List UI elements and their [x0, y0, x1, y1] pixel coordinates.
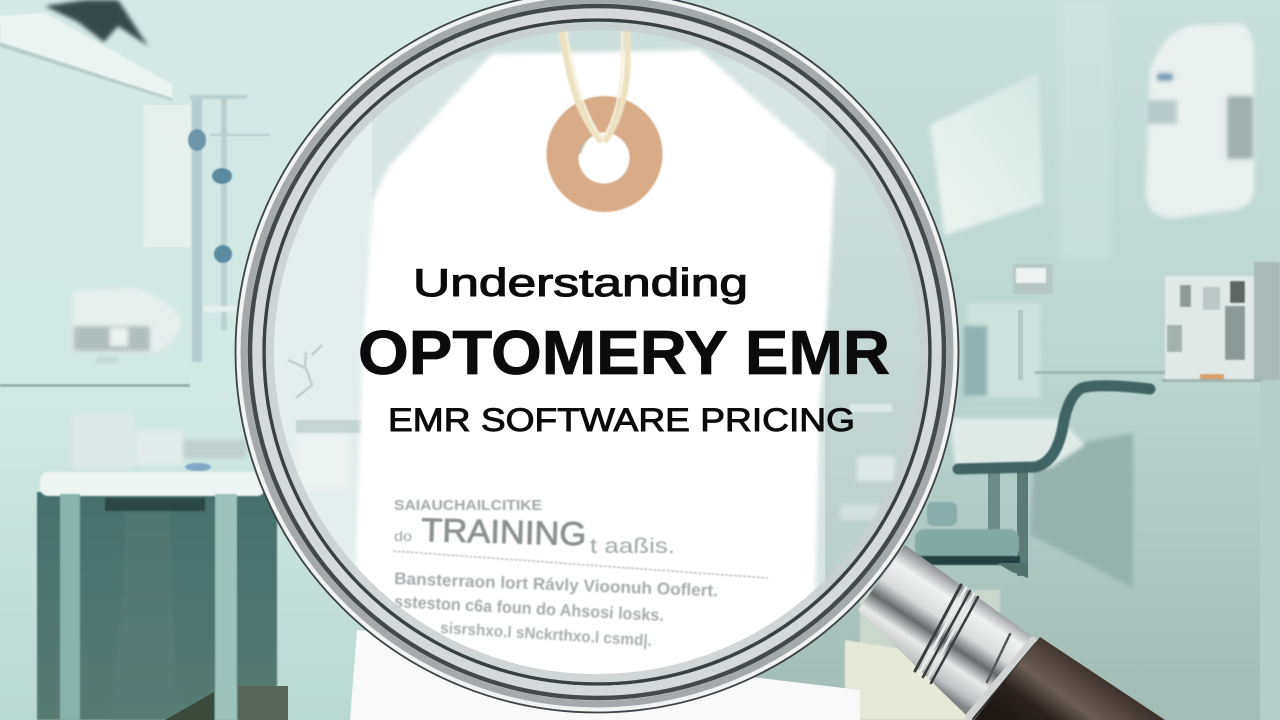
exam table: [37, 472, 288, 720]
floor block behind handle: [845, 590, 1000, 720]
title line 3: EMR SOFTWARE PRICING: EMR SOFTWARE PRICING: [388, 402, 855, 438]
wall panel right: [930, 73, 1043, 235]
fine print body lines: Bansterraon lort Rávly Vioonuh Ooflert.: [394, 569, 718, 600]
wall dispenser: [1146, 24, 1254, 218]
sink area and chair: [915, 264, 1165, 588]
lens rim: [236, 0, 958, 712]
fine print block: ssteston c6a foun do Ahsosi losks.: [394, 592, 664, 625]
fine print block: [393, 497, 768, 650]
wall shelf with equipment: [0, 0, 172, 101]
title line 1: Understanding: Understanding: [413, 262, 748, 305]
tag string: [561, 30, 628, 140]
magnified room at right edge: [825, 153, 920, 580]
fine print dashed rule: [393, 551, 768, 578]
paper price tag outside the lens: [350, 630, 860, 720]
wall cabinet with supplies: [1162, 262, 1280, 382]
wall frame left: [144, 105, 191, 247]
magnified room at left edge: [274, 122, 372, 565]
lens top tint: [471, 30, 723, 56]
black grip: [974, 637, 1165, 720]
magnifier handle: [858, 545, 1165, 720]
training suffix: t aaßis.: [590, 535, 675, 558]
training heading: TRAINING: [421, 511, 587, 552]
title line 2: OPTOMERY EMR: OPTOMERY EMR: [358, 319, 890, 388]
tag eyelet: [546, 96, 662, 212]
handle ferrule: [858, 545, 1033, 717]
lens interior: [274, 30, 920, 670]
price tag paper: [352, 50, 835, 720]
title text: [358, 262, 890, 438]
handle collar rings: [915, 585, 1036, 719]
fine print small prefix: do: [394, 528, 412, 544]
fine print top line: SAIAUCHAILCITIKE: [394, 497, 542, 514]
IV stand: [162, 95, 270, 362]
small wall device: [1013, 264, 1053, 294]
wall rail and counter items: [0, 384, 246, 471]
wall device: [73, 288, 182, 362]
fine print block: sisrshxo.l sNckrthxo.l csmd|.: [440, 620, 652, 650]
